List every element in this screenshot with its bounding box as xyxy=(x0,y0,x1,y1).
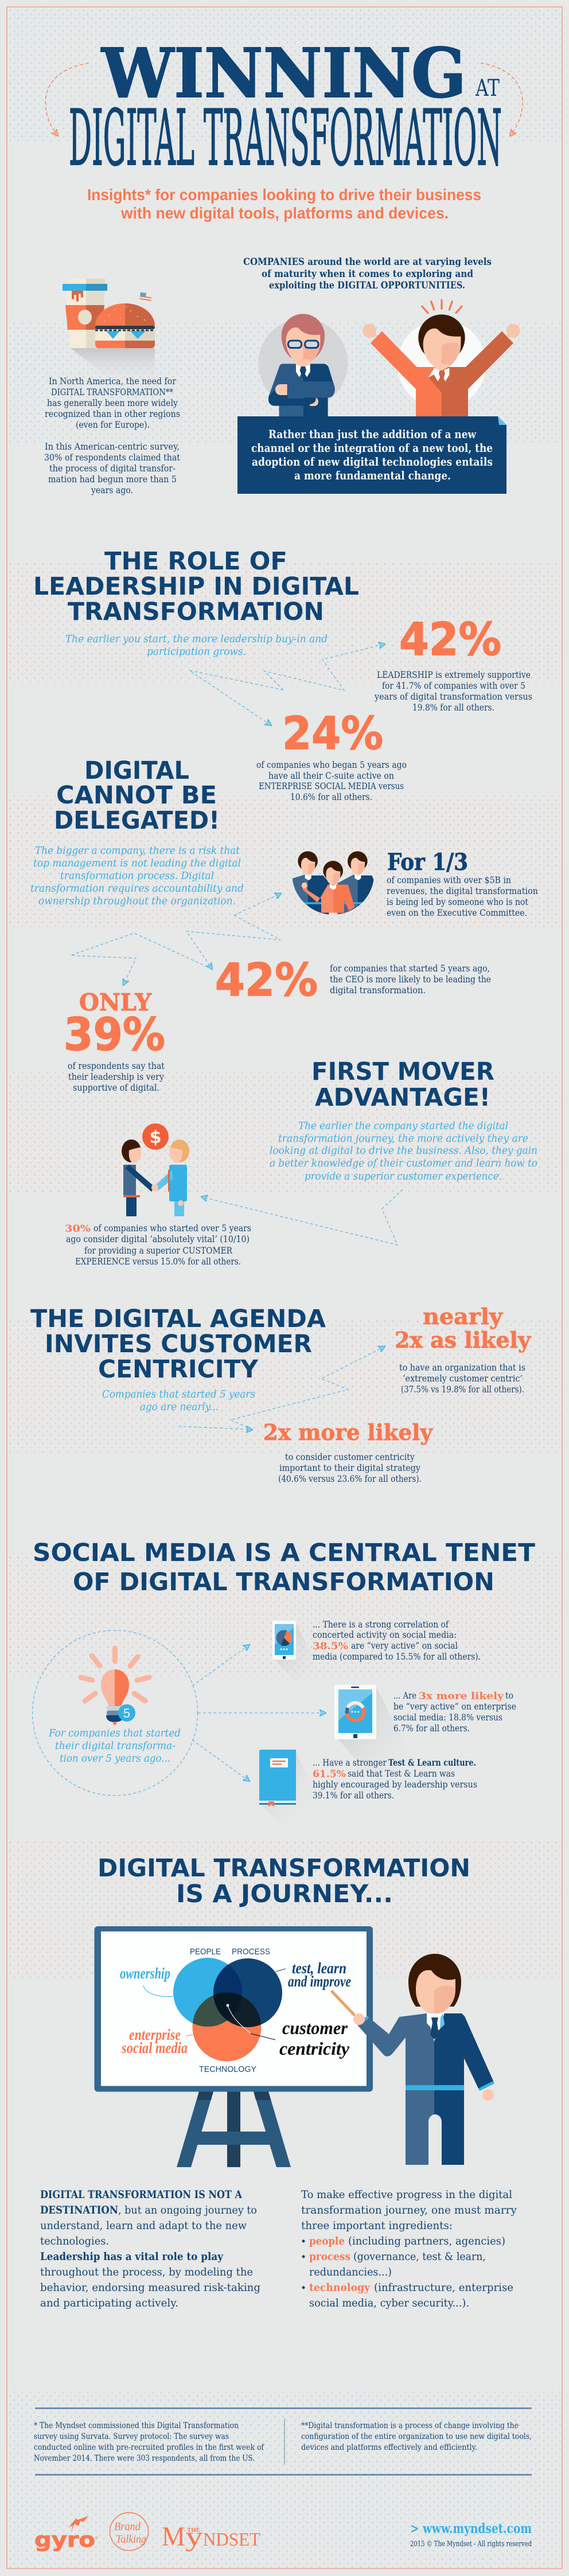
heading: journey xyxy=(98,1855,470,1908)
text: earlier the company: looking at digital to drive the business. Also, they gain xyxy=(270,1145,537,1157)
logo: the myndset: y xyxy=(185,2522,203,2552)
stat: 42 percent leadership: 42% xyxy=(399,614,501,666)
stat: 42 percent CEO: 42% xyxy=(215,955,318,1006)
text: 30 percent customer experience xyxy=(65,1223,251,1267)
stat: only 39 percent: 39% xyxy=(64,1009,165,1061)
arrow: to only 39 percent xyxy=(71,933,212,985)
text: companies started 5 years ago xyxy=(102,1389,255,1413)
stat: 42 percent CEO: digital transformation. xyxy=(330,985,426,996)
text: 30 percent customer experience: 30% xyxy=(65,1223,91,1235)
text: not a destination: technologies. xyxy=(40,2235,109,2247)
badge: five: 5 xyxy=(123,1706,130,1720)
text: bigger company risk xyxy=(30,845,244,907)
stat: only 39 percent: their leadership is very xyxy=(68,1071,164,1082)
text: north america: recognized than in other regions xyxy=(45,408,180,419)
text: correlation social media: concerted activity on social media: xyxy=(313,1629,457,1640)
text: 3x more likely xyxy=(393,1690,516,1734)
text: earlier the company: a better knowledge of their customer and learn how to xyxy=(270,1158,537,1169)
footnote: definition: **Digital transformation is a process of change involving the xyxy=(301,2421,519,2430)
icon: light bulb xyxy=(81,1648,149,1725)
text: not a destination xyxy=(40,2189,260,2309)
text: not a destination: and participating actively. xyxy=(40,2297,178,2309)
logo: brand talking: Talking xyxy=(116,2533,146,2546)
link: website and copyright xyxy=(410,2521,532,2548)
link: website and copyright: > www.myndset.com xyxy=(410,2521,532,2536)
text: earlier the company: provide a superior customer experience. xyxy=(305,1171,502,1182)
stat: nearly 2x as likely xyxy=(395,1303,531,1395)
text: earlier you start xyxy=(65,634,328,658)
text: 3x more likely: to xyxy=(505,1690,513,1701)
stat: for one third: of companies with over $5B in xyxy=(387,875,511,885)
stat: only 39 percent: supportive of digital. xyxy=(73,1082,159,1093)
heading: first mover advantage xyxy=(311,1058,494,1112)
text: companies intro: exploiting the DIGITAL OPPORTUNITIES. xyxy=(269,280,465,291)
label: test learn improve xyxy=(276,1960,351,1990)
stat: 42 percent leadership: 19.8% for all others. xyxy=(412,702,494,713)
text: north america: has generally been more widely xyxy=(47,397,178,408)
heading: journey: IS A JOURNEY... xyxy=(176,1880,393,1908)
stat: for one third: is being led by someone who is not xyxy=(387,896,528,907)
heading: digital cannot be delegated: CANNOT BE xyxy=(56,782,217,810)
text: earlier the company: The earlier the company started the digital xyxy=(298,1121,508,1132)
arrow: to for one third xyxy=(234,893,281,915)
text: companies intro xyxy=(243,256,492,291)
logo: gyro: ® xyxy=(95,2536,99,2540)
stat: for one third: revenues, the digital transformation xyxy=(387,885,538,896)
heading: role of leadership xyxy=(33,548,359,626)
label: test learn improve: test, learn xyxy=(292,1960,346,1977)
text: three ingredients: people xyxy=(309,2235,345,2247)
stat: for one third: For 1/3 xyxy=(387,849,468,876)
stat: nearly 2x as likely: (37.5% vs 19.8% for all others). xyxy=(401,1384,524,1395)
text: three ingredients: social media, cyber security...). xyxy=(309,2297,469,2309)
text: test and learn: 61.5% xyxy=(313,1769,346,1780)
stat: 42 percent leadership: for 41.7% of companies with over 5 xyxy=(382,680,525,691)
stat: 2x more likely: (40.6% versus 23.6% for all others). xyxy=(278,1473,422,1484)
stat: 42 percent leadership xyxy=(374,614,532,713)
heading: first mover advantage: ADVANTAGE! xyxy=(315,1084,490,1112)
text: not a destination: DIGITAL TRANSFORMATION IS NOT A xyxy=(40,2189,243,2201)
arrow: to book xyxy=(192,1740,250,1781)
text: not a destination: DESTINATION xyxy=(40,2204,118,2216)
footnote: definition: devices and platforms effectively and efficiently. xyxy=(301,2443,477,2452)
text: bigger company risk: transformation requires accountability and xyxy=(30,883,244,895)
callout: dark blue box: Rather than just the addition of a new xyxy=(268,428,477,441)
text: three ingredients xyxy=(301,2189,517,2309)
text: earlier you start: participation grows. xyxy=(147,646,246,658)
text: for companies that started xyxy=(48,1728,181,1765)
logo: gyro xyxy=(34,2516,99,2552)
text: not a destination: understand, learn and adapt to the new xyxy=(40,2220,247,2232)
text: three ingredients: transformation journey, one must marry xyxy=(301,2204,517,2216)
chart: venn diagram xyxy=(173,1947,282,2074)
heading: digital agenda: THE DIGITAL AGENDA xyxy=(30,1305,326,1333)
text: not a destination: throughout the process, by modeling the xyxy=(40,2266,253,2278)
panel: presentation board xyxy=(94,1926,373,2092)
title: AT xyxy=(475,75,500,102)
chart: venn diagram: PEOPLE xyxy=(190,1947,221,1957)
arrow: to tablet xyxy=(198,1712,326,1714)
text: north america: 30% of respondents claimed that xyxy=(44,452,180,463)
stat: only 39 percent: ONLY xyxy=(79,989,152,1016)
heading: digital cannot be delegated: DELEGATED! xyxy=(54,807,220,835)
text: earlier the company xyxy=(270,1121,537,1182)
text: correlation social media: ... There is a strong correlation of xyxy=(313,1619,449,1630)
stat: nearly 2x as likely: 2x as likely xyxy=(395,1327,531,1353)
stat: 24 percent social media: 10.6% for all others. xyxy=(290,791,372,802)
text: not a destination: behavior, endorsing measured risk-taking xyxy=(40,2282,260,2294)
heading: digital cannot be delegated: DIGITAL xyxy=(84,757,189,785)
text: correlation social media: media (compared to 15.5% for all others). xyxy=(313,1651,481,1662)
text: three ingredients: (infrastructure, enterprise xyxy=(374,2282,513,2294)
icon: soda and burger xyxy=(63,279,155,384)
stat: nearly 2x as likely: ‘extremely customer centric’ xyxy=(403,1373,523,1384)
footnote: survey: conducted online with pre-recruited profiles in the first week of xyxy=(34,2443,265,2452)
arrow: first mover to handshake xyxy=(201,1189,403,1245)
label: customer centricity: customer xyxy=(282,2017,348,2038)
icon: book xyxy=(259,1750,321,1833)
stat: 42 percent CEO xyxy=(215,955,491,1006)
stat: 2x more likely xyxy=(263,1419,433,1484)
text: 30 percent customer experience: ago consider digital ‘absolutely vital’ (10/10) xyxy=(66,1234,250,1244)
heading: social media xyxy=(33,1539,535,1597)
chart: venn diagram: TECHNOLOGY xyxy=(199,2064,256,2074)
text: 3x more likely: be “very active” on enterprise xyxy=(393,1701,516,1712)
heading: role of leadership: THE ROLE OF xyxy=(104,548,287,576)
text: test and learn xyxy=(313,1757,477,1801)
text: 30 percent customer experience: of companies who started over 5 years xyxy=(93,1223,251,1234)
text: north america xyxy=(44,376,180,495)
stat: 42 percent CEO: the CEO is more likely to be leading the xyxy=(330,974,491,985)
text: earlier the company: transformation journey, the more actively they are xyxy=(278,1133,528,1145)
text: 3x more likely: 6.7% for all others. xyxy=(393,1723,470,1734)
arrow: title left arc xyxy=(45,63,89,136)
stat: nearly 2x as likely: to have an organization that is xyxy=(399,1362,525,1373)
text: test and learn: said that Test & Learn was xyxy=(348,1768,455,1779)
heading: digital agenda xyxy=(30,1305,326,1384)
icon: presenter xyxy=(332,1954,494,2165)
stat: 42 percent CEO: for companies that started 5 years ago, xyxy=(330,963,490,974)
text: 3x more likely: social media: 18.8% versus xyxy=(393,1712,502,1723)
heading: first mover advantage: FIRST MOVER xyxy=(311,1058,494,1086)
label: customer centricity xyxy=(226,2004,350,2059)
stat: 42 percent leadership: LEADERSHIP is extremely supportive xyxy=(377,669,531,680)
arrow: to 2x as likely xyxy=(231,1346,385,1430)
text: three ingredients: process xyxy=(309,2251,350,2263)
text: test and learn: 39.1% for all others. xyxy=(313,1790,394,1801)
stat: only 39 percent xyxy=(64,989,165,1093)
stat: 24 percent social media: ENTERPRISE SOCIAL MEDIA versus xyxy=(259,780,404,791)
text: for companies that started: tion over 5 years ago... xyxy=(60,1753,170,1765)
callout: dark blue box xyxy=(237,416,506,494)
footnote: survey: * The Myndset commissioned this Digital Transformation xyxy=(34,2421,239,2430)
text: three ingredients: three important ingredients: xyxy=(301,2220,453,2232)
footnote: definition: configuration of the entire organization to use new digital tools, xyxy=(301,2432,532,2441)
stat: for one third: even on the Executive Committee. xyxy=(387,907,527,918)
icon: easel legs xyxy=(177,2091,291,2167)
arrow: to 42 percent xyxy=(264,644,385,690)
heading: digital agenda: INVITES CUSTOMER xyxy=(45,1330,312,1359)
text: three ingredients: To make effective progress in the digital xyxy=(301,2189,512,2201)
text: bigger company risk: ownership throughout the organization. xyxy=(38,896,236,907)
heading: journey: DIGITAL TRANSFORMATION xyxy=(98,1855,470,1883)
icon: handshake with dollar: $ xyxy=(150,1127,161,1148)
footnote: survey: November 2014. There were 303 respondents, all from the US. xyxy=(34,2454,255,2463)
subtitle: with new digital tools, platforms and devices. xyxy=(120,204,449,222)
footnote: survey: survey using Survata. Survey protocol: The survey was xyxy=(34,2432,229,2441)
text: 30 percent customer experience: EXPERIENCE versus 15.0% for all others. xyxy=(75,1256,241,1267)
label: customer centricity: centricity xyxy=(279,2038,350,2059)
arrow: to 24 percent xyxy=(189,670,283,725)
heading: role of leadership: TRANSFORMATION xyxy=(68,598,324,626)
logo: brand talking: Brand xyxy=(114,2520,141,2533)
chart: venn diagram: PROCESS xyxy=(232,1947,270,1957)
text: 30 percent customer experience: for providing a superior CUSTOMER xyxy=(84,1245,233,1256)
stat: 2x more likely: to consider customer centricity xyxy=(285,1451,415,1462)
text: companies started 5 years ago: Companies that started 5 years xyxy=(102,1389,255,1400)
stat: 2x more likely: important to their digital strategy xyxy=(279,1462,420,1473)
text: companies intro: of maturity when it comes to exploring and xyxy=(262,268,473,279)
text: not a destination: Leadership has a vital role to play xyxy=(40,2251,224,2263)
logo: the myndset xyxy=(162,2522,260,2552)
label: ownership xyxy=(120,1965,173,1997)
heading: role of leadership: LEADERSHIP IN DIGITAL xyxy=(33,573,359,601)
heading: social media: SOCIAL MEDIA IS A CENTRAL TENET xyxy=(33,1539,535,1567)
text: three ingredients: (governance, test & learn, xyxy=(353,2251,486,2263)
icon: handshake with dollar xyxy=(122,1123,189,1216)
callout: dark blue box: a more fundamental change. xyxy=(294,469,451,482)
arrow: to 2x more likely xyxy=(178,1426,252,1430)
title: WINNING xyxy=(100,33,466,113)
link: website and copyright: 2015 © The Myndset - All rights reserved xyxy=(410,2540,532,2548)
icon: cheering manager xyxy=(363,300,520,416)
logo: the myndset: THE xyxy=(187,2527,200,2534)
logo: brand talking xyxy=(110,2513,148,2551)
text: correlation social media xyxy=(313,1619,481,1662)
stat: 2x more likely: 2x more likely xyxy=(263,1419,433,1445)
text: north america: In this American-centric survey, xyxy=(45,441,180,452)
text: 3x more likely: ... Are xyxy=(393,1690,416,1701)
stat: nearly 2x as likely: nearly xyxy=(423,1303,503,1329)
text: test and learn: highly encouraged by leadership versus xyxy=(313,1779,477,1790)
text: north america: (even for Europe). xyxy=(76,419,150,430)
text: north america: the process of digital transfor- xyxy=(49,463,176,474)
text: earlier you start: The earlier you start, the more leadership buy-in and xyxy=(65,634,328,645)
text: bigger company risk: transformation process. Digital xyxy=(60,871,214,882)
title xyxy=(69,33,502,183)
text: bigger company risk: The bigger a company, there is a risk that xyxy=(35,845,240,857)
subtitle xyxy=(87,186,481,222)
text: test and learn: Test & Learn culture. xyxy=(388,1757,476,1768)
text: bigger company risk: top management is not leading the digital xyxy=(33,858,241,869)
text: companies started 5 years ago: ago are nearly... xyxy=(140,1402,219,1413)
stat: 24 percent social media: 24% xyxy=(282,708,383,760)
text: correlation social media: 38.5% xyxy=(313,1641,348,1652)
label: ownership: ownership xyxy=(120,1965,170,1982)
logo: the myndset: NDSET xyxy=(203,2530,260,2550)
arrow: title right arc xyxy=(481,63,523,136)
stat: only 39 percent: of respondents say that xyxy=(68,1060,165,1071)
icon: manager with glasses xyxy=(258,314,348,417)
stat: 24 percent social media: of companies who began 5 years ago xyxy=(256,759,407,770)
arrow: to phone xyxy=(192,1645,250,1686)
logo: gyro: gyro xyxy=(34,2528,95,2552)
text: three ingredients: (including partners, agencies) xyxy=(348,2235,505,2247)
text: 3x more likely: 3x more likely xyxy=(419,1691,504,1702)
footnote: survey xyxy=(34,2421,265,2463)
text: north america: mation had begun more than 5 xyxy=(48,474,177,485)
heading: digital cannot be delegated xyxy=(54,757,220,835)
text: test and learn: ... Have a stronger xyxy=(313,1757,387,1768)
callout: dark blue box: adoption of new digital technologies entails xyxy=(252,455,493,469)
icon: three executives xyxy=(293,851,375,915)
text: for companies that started: For companies that started xyxy=(48,1728,181,1739)
subtitle: Insights* for companies looking to drive their business xyxy=(87,186,481,204)
stat: 24 percent social media: have all their C-suite active on xyxy=(268,770,394,781)
text: companies intro: COMPANIES around the world are at varying levels xyxy=(243,256,492,267)
label: enterprise social media xyxy=(121,2026,193,2056)
text: north america: DIGITAL TRANSFORMATION** xyxy=(51,387,173,397)
label: enterprise social media: enterprise xyxy=(129,2026,181,2043)
label: test learn improve: and improve xyxy=(288,1973,351,1990)
text: north america: In North America, the need for xyxy=(49,376,176,387)
callout: dark blue box: channel or the integration of a new tool, the xyxy=(251,442,493,455)
stat: 42 percent leadership: years of digital transformation versus xyxy=(374,691,532,702)
stat: for one third xyxy=(387,849,538,918)
heading: digital agenda: CENTRICITY xyxy=(98,1356,259,1384)
label: enterprise social media: social media xyxy=(121,2039,188,2056)
text: correlation social media: are “very active” on social xyxy=(351,1640,458,1651)
arrow: to 42 percent CEO xyxy=(186,915,280,969)
logo: the myndset: M xyxy=(162,2522,185,2552)
dashed circle xyxy=(32,1630,197,1796)
icon: phone xyxy=(272,1621,327,1697)
heading: social media: OF DIGITAL TRANSFORMATION xyxy=(73,1568,494,1597)
text: three ingredients: redundancies...) xyxy=(309,2266,392,2278)
text: north america: years ago. xyxy=(91,485,133,495)
text: three ingredients: technology xyxy=(309,2282,371,2294)
text: not a destination: , but an ongoing journey to xyxy=(118,2204,257,2216)
icon: tablet xyxy=(334,1685,424,1806)
footnote: definition xyxy=(301,2421,532,2452)
text: for companies that started: their digital transforma- xyxy=(55,1740,176,1752)
stat: 24 percent social media xyxy=(256,708,407,802)
